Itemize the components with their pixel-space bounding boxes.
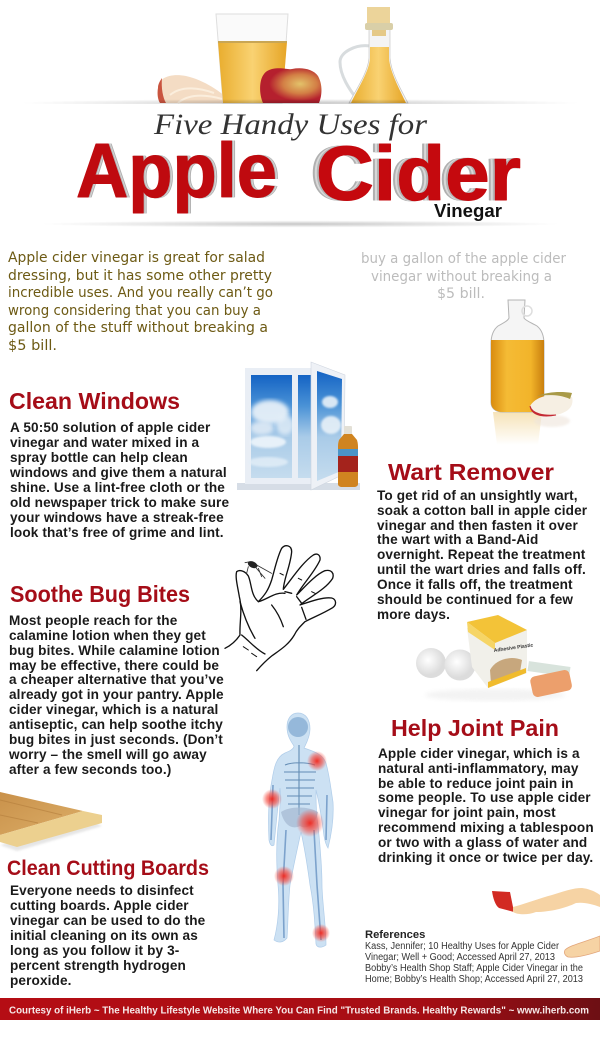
references: Bobby’s Health Shop Staff; Apple Cider Vinegar in the <box>365 963 583 974</box>
text: Help Joint Pain: some people. To use apple cider <box>378 790 591 805</box>
icon: open window with vinegar bottle <box>237 362 360 490</box>
text: Help Joint Pain: natural anti-inflammatory, may <box>378 761 579 776</box>
text: Soothe Bug Bites: a cheaper alternative that you’ve <box>9 672 224 687</box>
icon: vinegar cruet <box>340 7 408 103</box>
intro text: wrong considering that you can buy a <box>8 303 261 319</box>
heading: Help Joint Pain: Help Joint Pain <box>391 715 559 741</box>
text: Help Joint Pain: drinking it once or twice per day. <box>378 850 593 865</box>
text: Clean Windows: windows and give them a natural <box>9 465 227 480</box>
text: Clean Windows: old newspaper trick to make sure <box>10 495 229 510</box>
text: Wart Remover: To get rid of an unsightly wart, <box>377 488 578 503</box>
text: Clean Cutting Boards: long as you follow it by 3- <box>10 943 179 958</box>
intro text: Apple cider vinegar is great for salad <box>8 250 265 266</box>
icon: cotton balls and bandages: Adhesive Plastic <box>493 642 534 654</box>
title: Cider: Cider <box>316 131 521 217</box>
text: Wart Remover: until the wart dries and falls off. <box>377 562 586 577</box>
text: Clean Cutting Boards: percent strength hydrogen <box>10 958 186 973</box>
text: Soothe Bug Bites: worry – the smell will go away <box>8 747 207 762</box>
title: Vinegar: Vinegar <box>434 201 502 221</box>
intro text <box>8 250 273 354</box>
text: Wart Remover: overnight. Repeat the treatment <box>377 547 586 562</box>
icon: hand with mosquito <box>225 546 336 671</box>
text: Clean Windows: spray bottle can help clean <box>10 450 188 465</box>
text: Help Joint Pain: be able to reduce joint pain in <box>378 776 574 791</box>
title lower shadow <box>40 220 560 228</box>
references <box>365 929 583 985</box>
icon: whole apple <box>260 68 322 103</box>
intro text: gallon of the stuff without breaking a <box>8 320 268 336</box>
heading: Wart Remover: Wart Remover <box>388 459 554 485</box>
icon: apple peel <box>492 888 600 957</box>
text: Wart Remover: should be continued for a few <box>377 592 573 607</box>
heading: Clean Cutting Boards: Clean Cutting Boards <box>7 856 209 880</box>
title: Apple: Apple <box>76 128 277 214</box>
icon: apple slices <box>157 75 232 103</box>
text: Wart Remover: soak a cotton ball in apple cider <box>377 503 588 518</box>
joint highlights <box>262 751 330 942</box>
text: Help Joint Pain <box>378 746 594 865</box>
header photo: cider glass, apple and bottle <box>157 7 408 103</box>
references: References <box>365 929 425 941</box>
text: Wart Remover: vinegar and then fasten it over <box>377 518 578 533</box>
intro text: dressing, but it has some other pretty <box>8 268 272 284</box>
text: Clean Cutting Boards: peroxide. <box>10 973 72 988</box>
text: Clean Windows: shine. Use a lint-free cloth or the <box>10 480 225 495</box>
text: Soothe Bug Bites: bug bites. While calamine lotion <box>9 643 220 658</box>
text: Clean Cutting Boards: cutting boards. Apple cider <box>10 898 189 913</box>
icon: gallon jug with apple half <box>491 300 572 445</box>
footer banner <box>0 998 600 1020</box>
text: Help Joint Pain: or two with a glass of water and <box>378 835 587 850</box>
references: Home; Bobby’s Health Shop; Accessed April 27, 2013 <box>365 974 583 985</box>
text: Clean Cutting Boards: Everyone needs to disinfect <box>10 883 194 898</box>
text: Soothe Bug Bites: calamine lotion when they get <box>9 628 206 643</box>
text: Soothe Bug Bites: antiseptic, can help soothe itchy <box>9 717 223 732</box>
text: Clean Windows: vinegar and water mixed in a <box>10 435 200 450</box>
text: Help Joint Pain: vinegar for joint pain, most <box>378 805 556 820</box>
text: Soothe Bug Bites: may be effective, there could be <box>9 658 219 673</box>
text: Soothe Bug Bites <box>8 613 224 777</box>
text: Clean Windows: your windows have a streak-free <box>10 510 224 525</box>
faded pull quote <box>361 251 566 302</box>
text: Clean Windows <box>9 420 229 540</box>
title tagline: Five Handy Uses for <box>153 108 427 141</box>
text: Soothe Bug Bites: Most people reach for the <box>9 613 178 628</box>
icon: small cider bottle <box>338 426 358 487</box>
icon: human body with inflamed joints <box>262 713 333 947</box>
references: Vinegar; Well + Good; Accessed April 27, 2013 <box>365 952 555 963</box>
text: Wart Remover: more days. <box>377 607 450 622</box>
text: Clean Windows: A 50:50 solution of apple cider <box>10 420 211 435</box>
text: Soothe Bug Bites: cider vinegar, which is a natural <box>9 702 218 717</box>
text: Clean Cutting Boards: initial cleaning on its own as <box>10 928 198 943</box>
icon: glass of cider <box>216 14 288 103</box>
intro text: $5 bill. <box>8 338 57 354</box>
icon: cutting board <box>0 792 102 851</box>
text: Clean Windows: look that’s free of grime and lint. <box>10 525 224 540</box>
intro text: incredible uses. And you really can’t go <box>8 285 273 301</box>
text: Clean Cutting Boards: vinegar can be used to do the <box>10 913 206 928</box>
faded pull quote: vinegar without breaking a <box>371 269 552 285</box>
text: Wart Remover: Once it falls off, the treatment <box>377 577 573 592</box>
text: Soothe Bug Bites: already got in your pantry. Apple <box>9 687 224 702</box>
faded pull quote: $5 bill. <box>437 286 485 302</box>
references: Kass, Jennifer; 10 Healthy Uses for Apple Cider <box>365 941 560 952</box>
faded pull quote: buy a gallon of the apple cider <box>361 251 566 267</box>
text: Help Joint Pain: Apple cider vinegar, which is a <box>378 746 580 761</box>
header shelf shadow <box>20 99 580 107</box>
text: Soothe Bug Bites: bug bites in just seconds. (Don’t <box>9 732 223 747</box>
text: Wart Remover <box>377 488 588 622</box>
text: Help Joint Pain: recommend mixing a tablespoon <box>378 820 594 835</box>
text: Clean Cutting Boards <box>10 883 206 988</box>
heading: Clean Windows: Clean Windows <box>9 388 180 414</box>
icon: cotton balls and bandages <box>416 615 573 701</box>
text: Soothe Bug Bites: after a few seconds too.) <box>9 762 171 777</box>
heading: Soothe Bug Bites: Soothe Bug Bites <box>10 581 190 607</box>
text: Wart Remover: the wart with a Band-Aid <box>377 532 538 547</box>
icon: mosquito <box>245 560 272 578</box>
